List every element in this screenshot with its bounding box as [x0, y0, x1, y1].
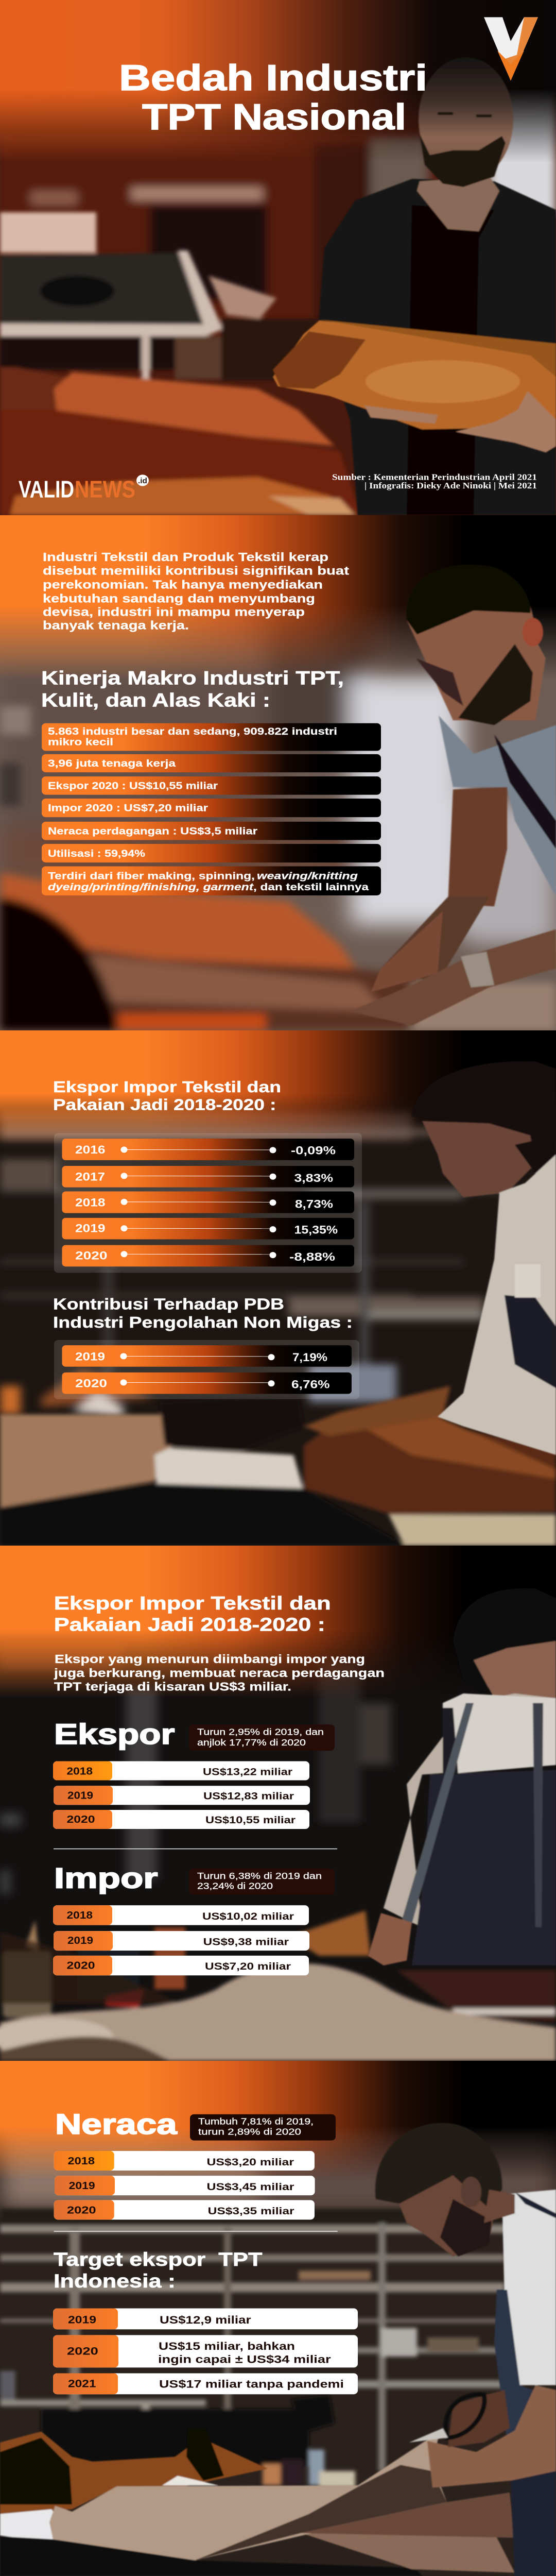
row: 2020: 2020: [75, 1249, 108, 1262]
stat row: neraca: [42, 822, 381, 840]
heading: Target ekspor: Target ekspor TPT: [54, 2249, 263, 2270]
row: 2019: 15,35%: [294, 1223, 338, 1236]
bar: ekspor 2020: 2020: [67, 1814, 95, 1825]
heading: Target ekspor: [54, 2249, 263, 2292]
bar: impor 2020: 2020: [67, 1960, 95, 1971]
bar: target 2021: [53, 2373, 358, 2394]
callout: neraca: [190, 2114, 336, 2141]
man bending over table: [350, 565, 556, 1026]
top orange gradient: [0, 515, 556, 680]
bar: ekspor 2020: [53, 1810, 309, 1829]
heading: Kontribusi PDB: [53, 1295, 353, 1331]
bar: impor 2020: US$7,20 miliar: [205, 1961, 291, 1972]
bar: target 2019: [53, 2309, 358, 2329]
callout: impor: Turun 6,38% di 2019 dan: [197, 1871, 322, 1881]
stat row: jumlah industri: mikro kecil: [48, 737, 113, 748]
man figure: [375, 2123, 556, 2576]
top orange gradient: [0, 1030, 556, 1145]
row: 2017: 3,83%: [294, 1172, 333, 1184]
source credit: Sumber : Kementerian Perindustrian April 2021: [332, 472, 537, 482]
bar: neraca 2020: 2020: [67, 2205, 96, 2216]
stat row: jumlah industri: [42, 723, 381, 751]
bar: target 2020: 2020: [67, 2345, 98, 2357]
callout: neraca: Tumbuh 7,81% di 2019,: [198, 2116, 314, 2127]
heading: Impor: Impor: [54, 1862, 158, 1894]
callout: ekspor: [189, 1724, 335, 1751]
icon: V logo: [484, 17, 538, 80]
bar: target 2020: [53, 2335, 358, 2367]
heading: Ekspor Impor: [54, 1592, 331, 1635]
stat row: tenaga kerja: 3,96 juta tenaga kerja: [48, 758, 176, 769]
intro text: Ekspor yang menurun diimbangi impor yang: [55, 1653, 365, 1666]
row: 2020: 6,76%: [291, 1378, 329, 1391]
heading: Kontribusi PDB: Kontribusi Terhadap PDB: [53, 1295, 284, 1313]
bar: neraca 2020: [54, 2200, 315, 2219]
intro text: devisa, industri ini mampu menyerap: [43, 605, 305, 619]
intro text: disebut memiliki kontribusi signifikan buat: [43, 565, 349, 578]
top orange gradient: [0, 2061, 556, 2180]
bar: impor 2019: [54, 1931, 309, 1951]
bar: impor 2018: US$10,02 miliar: [202, 1911, 294, 1922]
heading: Kinerja Makro: Kinerja Makro Industri TPT,: [41, 668, 344, 689]
heading: Kinerja Makro: [41, 668, 344, 711]
top orange gradient: [0, 0, 556, 162]
row: 2018: 2018: [75, 1196, 106, 1209]
intro text: banyak tenaga kerja.: [43, 619, 189, 632]
heading: Ekspor Impor: [53, 1078, 281, 1113]
stat row: cakupan: weaving/knitting: [257, 871, 358, 882]
stat row: tenaga kerja: [42, 754, 381, 772]
title: TPT Nasional: [142, 97, 406, 137]
heading: Ekspor Impor: Ekspor Impor Tekstil dan: [53, 1078, 281, 1096]
stat row: jumlah industri: 5.863 industri besar dan sedang, 909.822 industri: [48, 726, 337, 737]
intro text: TPT terjaga di kisaran US$3 miliar.: [54, 1680, 291, 1693]
bar: target 2019: US$12,9 miliar: [160, 2314, 251, 2326]
source credit: | Infografis: Dieky Ade Ninoki | Mei 2021: [364, 481, 537, 490]
heading: Ekspor Impor: Pakaian Jadi 2018-2020 :: [54, 1614, 325, 1635]
stat row: utilisasi: [42, 844, 381, 862]
stat row: cakupan: , dan tekstil lainnya: [253, 882, 369, 893]
stat row: ekspor: [42, 776, 381, 795]
stat row: ekspor: Ekspor 2020 : US$10,55 miliar: [48, 781, 218, 791]
stat row: cakupan: [42, 866, 381, 895]
logo: Validnews.id: VALID: [19, 476, 74, 503]
intro text: perekonomian. Tak hanya menyediakan: [43, 578, 323, 591]
stat row: cakupan: Terdiri dari fiber making, spinning,: [48, 871, 255, 882]
row: 2018: [62, 1191, 354, 1213]
bar: target 2019: 2019: [68, 2313, 96, 2326]
row: 2020: 2020: [75, 1377, 107, 1389]
panel: ekspor impor: [0, 1546, 556, 2061]
heading: Kontribusi PDB: Industri Pengolahan Non Migas :: [53, 1313, 353, 1331]
callout: impor: 23,24% di 2020: [197, 1880, 273, 1891]
intro text: Industri Tekstil dan Produk Tekstil kerap: [43, 551, 328, 564]
heading: Target ekspor: Indonesia :: [54, 2270, 176, 2292]
panel: kinerja makro: [0, 515, 556, 1030]
stat row: neraca: Neraca perdagangan : US$3,5 miliar: [48, 826, 257, 837]
bar: neraca 2019: [55, 2176, 315, 2195]
row: 2020: [62, 1372, 352, 1394]
logo: Validnews.id: [19, 474, 149, 503]
chart: growth 2016-2020: [54, 1133, 362, 1273]
callout: impor: [189, 1869, 335, 1895]
bar: target 2021: 2021: [68, 2377, 96, 2389]
row: 2020: -8,88%: [289, 1250, 335, 1263]
heading: Ekspor Impor: Pakaian Jadi 2018-2020 :: [53, 1096, 276, 1113]
panel: pertumbuhan dan kontribusi: [0, 1030, 556, 1546]
bar: ekspor 2018: 2018: [67, 1766, 93, 1777]
heading: Ekspor: Ekspor: [54, 1719, 175, 1751]
row: 2019: 2019: [75, 1350, 105, 1363]
bar: ekspor 2018: US$13,22 miliar: [203, 1767, 292, 1777]
callout: ekspor: Turun 2,95% di 2019, dan: [197, 1726, 324, 1737]
row: 2018: 8,73%: [295, 1197, 333, 1210]
panel: cover: [0, 0, 556, 515]
intro text: juga berkurang, membuat neraca perdagangan: [54, 1667, 385, 1680]
bar: ekspor 2020: US$10,55 miliar: [205, 1815, 296, 1826]
bar: neraca 2018: US$3,20 miliar: [207, 2157, 294, 2168]
heading: Ekspor Impor: Ekspor Impor Tekstil dan: [54, 1592, 331, 1614]
photo: craftsman cutting leather: [0, 612, 556, 1030]
title: Bedah Industri: [119, 58, 427, 98]
row: 2019: [62, 1345, 352, 1367]
photo: leather craftsman holding a roll in workshop: [0, 92, 556, 515]
title: [119, 58, 427, 137]
bar: target 2020: ingin capai ± US$34 miliar: [158, 2353, 331, 2365]
bar: target 2020: US$15 miliar, bahkan: [159, 2340, 295, 2352]
bar: ekspor 2019: [54, 1786, 310, 1805]
bar: neraca 2019: US$3,45 miliar: [207, 2182, 294, 2193]
heading: Neraca: Neraca: [55, 2109, 178, 2141]
photo: woman in apron looking aside: [0, 1546, 556, 2061]
bar: impor 2019: 2019: [67, 1935, 93, 1946]
intro text: kebutuhan sandang dan menyumbang: [43, 592, 315, 605]
bar: ekspor 2018: [53, 1761, 309, 1781]
stat row: utilisasi: Utilisasi : 59,94%: [48, 849, 145, 859]
bar: impor 2020: [53, 1956, 309, 1975]
top orange gradient: [0, 1546, 556, 1698]
photo: man cutting leather with scissors: [0, 2061, 556, 2576]
callout: neraca: turun 2,89% di 2020: [198, 2126, 301, 2137]
row: 2019: [62, 1218, 354, 1240]
intro text: [43, 551, 349, 632]
woman figure: [412, 1061, 556, 1455]
row: 2017: 2017: [75, 1170, 105, 1183]
stat row: impor: [42, 799, 381, 817]
callout: ekspor: anjlok 17,77% di 2020: [197, 1737, 306, 1748]
bar: impor 2018: [53, 1905, 309, 1925]
bar: neraca 2018: 2018: [68, 2156, 95, 2167]
row: 2019: 7,19%: [292, 1351, 327, 1364]
logo: Validnews.id: .id: [138, 477, 147, 485]
bar: target 2021: US$17 miliar tanpa pandemi: [159, 2378, 344, 2390]
bar: impor 2018: 2018: [67, 1910, 93, 1921]
logo: Validnews.id: NEWS: [75, 476, 135, 503]
row: 2016: 2016: [75, 1143, 106, 1156]
row: 2016: [62, 1139, 354, 1160]
row: 2020: [62, 1245, 354, 1266]
woman figure: [368, 1588, 556, 1965]
chart: kontribusi PDB: [54, 1340, 359, 1399]
bar: neraca 2019: 2019: [69, 2180, 95, 2192]
intro text: [54, 1653, 385, 1693]
row: 2019: 2019: [75, 1222, 106, 1234]
photo: woman working in workshop: [0, 1030, 556, 1546]
source credit: [332, 472, 537, 490]
stat row: impor: Impor 2020 : US$7,20 miliar: [48, 803, 208, 814]
panel: neraca dan target: [0, 2061, 556, 2576]
bar: neraca 2020: US$3,35 miliar: [208, 2206, 294, 2217]
bar: impor 2019: US$9,38 miliar: [203, 1937, 289, 1947]
row: 2017: [62, 1166, 354, 1188]
row: 2016: -0,09%: [291, 1144, 336, 1157]
heading: Kinerja Makro: Kulit, dan Alas Kaki :: [41, 690, 270, 711]
bar: neraca 2018: [54, 2151, 315, 2171]
bar: ekspor 2019: 2019: [67, 1790, 93, 1801]
stat row: cakupan: dyeing/printing/finishing, garment: [48, 882, 254, 893]
man with leather roll: [273, 57, 556, 515]
bar: ekspor 2019: US$12,83 miliar: [203, 1791, 294, 1802]
